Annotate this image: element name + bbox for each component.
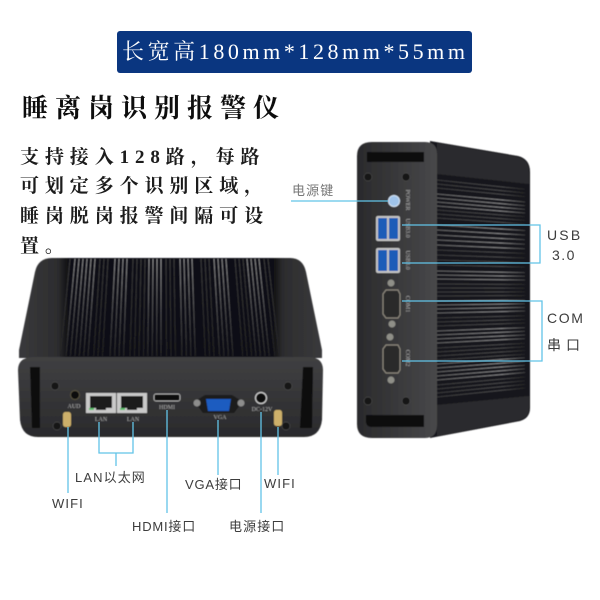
callout: right WIFI: WIFI xyxy=(264,476,296,491)
callout: USB 3.0: USB xyxy=(547,227,582,243)
callout: left WIFI xyxy=(52,427,84,511)
side fins bright xyxy=(437,194,525,380)
port captions xyxy=(404,190,410,366)
callout: power jack xyxy=(229,412,285,534)
callout: COM serial port: COM xyxy=(547,310,584,326)
callout: COM serial port: 串口 xyxy=(547,337,585,353)
port captions: USB3.0 xyxy=(404,218,410,238)
screws xyxy=(364,173,410,405)
heatsink fins dim xyxy=(60,259,279,356)
callout: HDMI port: HDMI接口 xyxy=(132,519,196,534)
callout: VGA port xyxy=(185,420,242,492)
port captions: POWER xyxy=(404,190,410,210)
LAN ports xyxy=(86,393,147,413)
port captions: HDMI xyxy=(159,405,175,411)
mounting slots xyxy=(366,152,424,427)
port captions: DC-12V xyxy=(252,407,273,413)
callout: LAN ethernet xyxy=(75,422,146,485)
port captions: VGA xyxy=(214,415,227,421)
callout: right WIFI xyxy=(264,427,296,491)
callout: COM serial port xyxy=(402,301,585,361)
callout: LAN ethernet: LAN以太网 xyxy=(75,470,146,485)
COM ports xyxy=(383,280,400,384)
front panel xyxy=(18,357,323,437)
dimension banner xyxy=(117,31,472,73)
antennas xyxy=(63,410,282,427)
callout: USB 3.0 xyxy=(402,225,582,263)
description text: 支持接入128路，每路 xyxy=(20,145,265,168)
port captions: USB3.0 xyxy=(404,250,410,270)
port captions: LAN xyxy=(95,417,108,423)
callout: HDMI port xyxy=(132,410,196,534)
front view of device xyxy=(18,258,323,437)
power button xyxy=(388,196,400,206)
audio jack xyxy=(70,390,80,400)
description text: 睡岗脱岗报警间隔可设 xyxy=(20,204,269,227)
port captions: COM1 xyxy=(404,296,410,312)
description text xyxy=(20,145,269,257)
USB ports xyxy=(376,216,400,273)
dimension banner: 长宽高180mm*128mm*55mm xyxy=(122,39,465,64)
port captions: COM2 xyxy=(404,350,410,366)
port captions xyxy=(68,404,273,423)
callout: left WIFI: WIFI xyxy=(52,496,84,511)
VGA port xyxy=(194,395,244,413)
description text: 可划定多个识别区域， xyxy=(20,175,269,197)
side fins dim xyxy=(437,180,525,397)
port captions: LAN xyxy=(127,417,140,423)
side top and bottom rails xyxy=(437,143,529,436)
title: 睡离岗识别报警仪 xyxy=(22,93,286,123)
callout: VGA port: VGA接口 xyxy=(185,477,242,492)
screws xyxy=(51,382,292,430)
heatsink fins bright xyxy=(66,259,269,356)
callout: power key xyxy=(291,183,388,201)
side panel xyxy=(357,142,437,438)
port captions: AUD xyxy=(68,404,81,410)
HDMI port xyxy=(154,394,180,401)
DC jack xyxy=(256,392,266,404)
description text: 置。 xyxy=(20,235,70,257)
side heatsink body xyxy=(430,141,530,438)
callout: USB 3.0: 3.0 xyxy=(552,247,576,263)
mounting slots xyxy=(30,367,313,428)
callout: power key: 电源键 xyxy=(292,183,334,198)
top heatsink body xyxy=(19,258,322,358)
side view of device xyxy=(357,141,530,438)
callout: power jack: 电源接口 xyxy=(229,519,285,534)
